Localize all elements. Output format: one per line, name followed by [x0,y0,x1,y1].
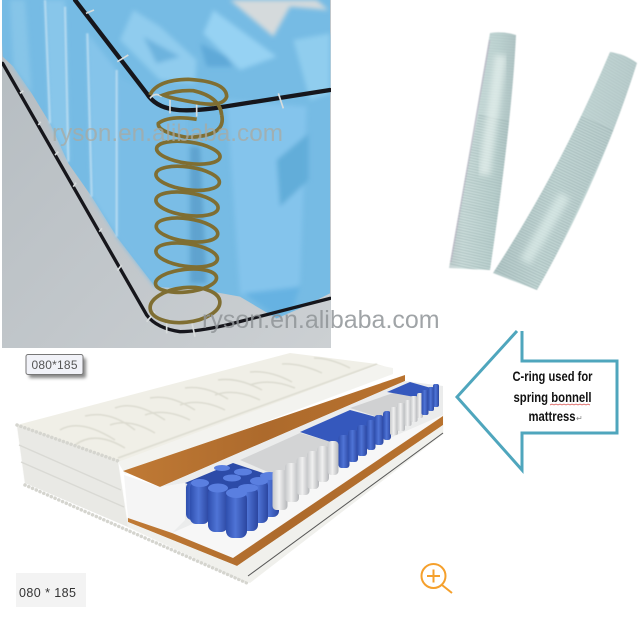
photo: C-ring tubes [440,25,640,295]
size tooltip: 080*185 [32,358,78,372]
callout text: spring bonnell [514,390,592,405]
callout text: mattress [528,409,576,424]
upper foam layer [118,365,393,474]
seam line [248,433,443,576]
watermark: upper: ryson.en.alibaba.com [52,120,283,147]
piped rope edges [17,425,247,583]
callout text: C-ring used for [512,369,593,384]
steel coil spring [148,79,227,326]
upper coir layer [123,375,405,487]
pocket tops [185,463,278,500]
photo floor [2,0,331,348]
left C-ring tube [448,32,516,270]
lower foam and bottom cover [128,425,443,583]
quilted top layer [17,353,393,462]
white pocket springs, first group [272,441,338,510]
callout text [512,369,593,424]
size label: 080 * 185 [19,586,76,600]
callout text: ↵ [576,414,583,423]
mattress side base [17,415,443,583]
callout arrow [457,331,617,470]
watermark: lower: ryson.en.alibaba.com [202,306,440,334]
blue pocket springs, front group [186,475,279,538]
left face bands [19,445,124,507]
white pocket springs, second group [390,393,423,435]
right C-ring tube [492,52,638,290]
cavity floor [172,415,443,558]
lower coir layer [128,416,443,566]
blue pocket tops, front group [191,465,279,498]
blue pocket springs, rear group [422,384,439,415]
size tooltip [26,354,86,378]
blue fabric pockets [0,0,330,318]
front foam block [124,475,185,533]
size label [16,573,86,607]
quilting lines [60,358,377,458]
mattress left face [17,425,128,527]
blue pocket springs, middle group [338,411,391,468]
icon: zoom magnifier [422,564,452,593]
spell-check squiggle [550,404,590,405]
black border wire [3,0,330,332]
mattress cutaway [17,353,443,583]
photo: pocket spring unit with steel coil [0,0,331,348]
cavity back wall [160,381,443,533]
wire clips [20,10,283,337]
